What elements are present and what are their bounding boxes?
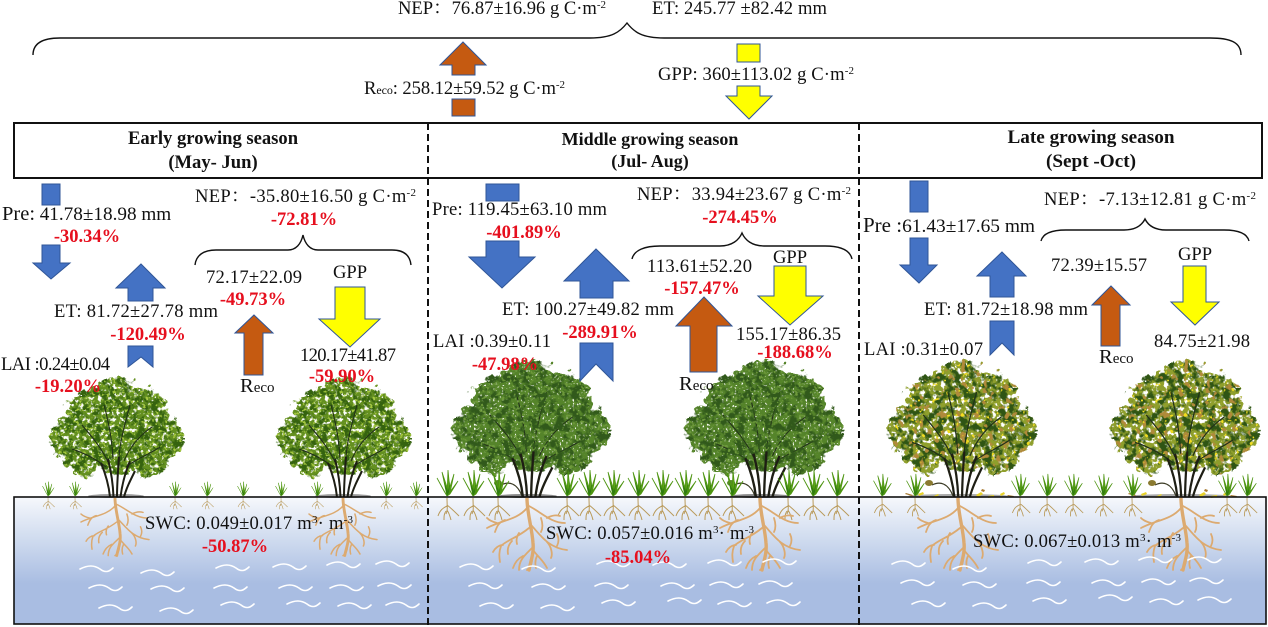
arrow: ET middle xyxy=(564,249,629,381)
SWC middle change: -85.04% xyxy=(605,548,671,568)
Reco late value: 72.39±15.57 xyxy=(1051,255,1147,276)
NEP late value: NEP：-7.13±12.81 g C·m xyxy=(1044,189,1246,210)
grass row: late xyxy=(874,474,1257,516)
SWC early value: -3 xyxy=(344,514,354,526)
panel: late growing season xyxy=(863,127,1258,609)
arrow: ET late xyxy=(977,252,1026,355)
NEP middle value: NEP：33.94±23.67 g C·m xyxy=(637,184,841,205)
GPP early label: GPP xyxy=(333,262,367,283)
GPP late value: 84.75±21.98 xyxy=(1154,331,1250,352)
roots: late xyxy=(918,498,1221,570)
Reco early change: -49.73% xyxy=(220,290,286,310)
SWC middle value: -3 xyxy=(745,524,754,536)
arrow: GPP early xyxy=(319,287,380,347)
panel: early growing season xyxy=(1,128,423,614)
total GPP value: -2 xyxy=(845,65,854,77)
arrow: total Reco up xyxy=(440,42,486,116)
NEP middle change: -274.45% xyxy=(702,208,778,228)
Reco late label: Reco xyxy=(1099,346,1134,368)
arrow: Reco late xyxy=(1092,286,1130,346)
SWC early value: · m xyxy=(318,513,344,534)
GPP middle value: 155.17±86.35 xyxy=(736,324,841,345)
header: late: (Sept -Oct) xyxy=(1046,151,1136,172)
brace early xyxy=(195,235,411,265)
tree: early left xyxy=(50,379,183,498)
ET middle value: ET: 100.27±49.82 mm xyxy=(502,299,675,320)
roots: early xyxy=(81,498,377,556)
header: late xyxy=(1007,127,1175,172)
water waves: early xyxy=(80,561,419,614)
roots: middle xyxy=(487,498,800,570)
header: middle: (Jul- Aug) xyxy=(611,151,689,172)
soil frame xyxy=(14,497,1266,624)
LAI early value: LAI :0.24±0.04 xyxy=(1,354,110,375)
header frame xyxy=(14,123,1262,178)
grass row: early xyxy=(42,482,423,509)
Reco early label: Reco xyxy=(240,375,275,397)
total Reco value: -2 xyxy=(556,79,565,91)
brace middle xyxy=(632,233,852,259)
brace late xyxy=(1041,219,1249,241)
GPP late label: GPP xyxy=(1178,244,1212,265)
header: middle xyxy=(562,129,738,172)
season divider: early to middle xyxy=(427,123,429,625)
GPP early change: -59.90% xyxy=(309,367,375,387)
SWC late value: -3 xyxy=(1172,532,1182,544)
LAI late value: LAI :0.31±0.07 xyxy=(864,339,983,360)
precipitation early value: Pre: 41.78±18.98 mm xyxy=(2,203,171,225)
tree: middle left xyxy=(452,362,609,498)
header: early: (May- Jun) xyxy=(168,152,258,173)
arrow: precipitation early xyxy=(33,184,70,279)
soil layer xyxy=(14,497,1266,624)
LAI middle change: -47.98% xyxy=(472,355,538,375)
tree: late left xyxy=(888,362,1035,498)
Reco early value: 72.17±22.09 xyxy=(206,267,302,288)
ET middle change: -289.91% xyxy=(562,323,638,343)
season divider: middle to late xyxy=(858,123,860,625)
arrow: total GPP down xyxy=(726,44,772,119)
annual totals xyxy=(33,0,1241,119)
NEP late value: -2 xyxy=(1247,190,1256,202)
SWC late value: · m xyxy=(1146,531,1172,552)
total GPP value: GPP: 360±113.02 g C·m xyxy=(658,64,845,85)
precipitation early change: -30.34% xyxy=(54,227,120,247)
SWC early value: 3 xyxy=(312,514,318,526)
NEP early change: -72.81% xyxy=(271,210,337,230)
arrow: Reco middle xyxy=(676,297,732,372)
total brace xyxy=(33,23,1241,55)
arrow: Reco early xyxy=(235,315,273,375)
SWC middle value: · m xyxy=(719,523,745,544)
ET early change: -120.49% xyxy=(110,325,186,345)
arrow: GPP late xyxy=(1171,266,1219,325)
arrow: GPP middle xyxy=(758,266,823,325)
header: early xyxy=(128,128,299,173)
SWC early change: -50.87% xyxy=(202,537,268,557)
grass row: middle xyxy=(437,470,849,520)
SWC late value: SWC: 0.067±0.013 m xyxy=(973,531,1140,552)
arrow: ET early xyxy=(116,264,165,367)
GPP middle change: -188.68% xyxy=(757,343,833,363)
tree: early right xyxy=(277,379,410,498)
Reco middle label: Reco xyxy=(679,373,714,395)
ET early value: ET: 81.72±27.78 mm xyxy=(54,301,219,322)
LAI early change: -19.20% xyxy=(35,377,101,397)
arrow: precipitation middle xyxy=(469,184,535,288)
header: middle: Middle growing season xyxy=(562,129,738,149)
SWC late value: 3 xyxy=(1140,532,1146,544)
NEP early value: -2 xyxy=(407,187,416,199)
header: early: Early growing season xyxy=(128,128,299,149)
NEP middle value: -2 xyxy=(842,185,851,197)
ET late value: ET: 81.72±18.98 mm xyxy=(924,299,1089,320)
NEP early value: NEP：-35.80±16.50 g C·m xyxy=(195,186,406,207)
total Reco value: Reco: 258.12±59.52 g C·m xyxy=(364,78,556,99)
SWC middle value: 3 xyxy=(713,524,719,536)
water waves: middle xyxy=(460,559,800,611)
SWC early value: SWC: 0.049±0.017 m xyxy=(145,513,312,534)
GPP middle label: GPP xyxy=(773,247,807,268)
Reco middle change: -157.47% xyxy=(664,279,740,299)
precipitation middle change: -401.89% xyxy=(486,223,562,243)
panel: middle growing season xyxy=(432,129,852,611)
tree: late right xyxy=(1111,362,1258,498)
tree: middle right xyxy=(685,362,842,498)
Reco middle value: 113.61±52.20 xyxy=(647,256,752,277)
arrow: precipitation late xyxy=(900,181,937,283)
GPP early value: 120.17±41.87 xyxy=(300,345,396,366)
SWC middle value: SWC: 0.057±0.016 m xyxy=(546,523,713,544)
water waves: late xyxy=(892,557,1231,609)
precipitation late value: Pre :61.43±17.65 mm xyxy=(863,213,1035,237)
LAI middle value: LAI :0.39±0.11 xyxy=(433,331,551,352)
precipitation middle value: Pre: 119.45±63.10 mm xyxy=(432,199,608,220)
header: late: Late growing season xyxy=(1007,127,1175,148)
